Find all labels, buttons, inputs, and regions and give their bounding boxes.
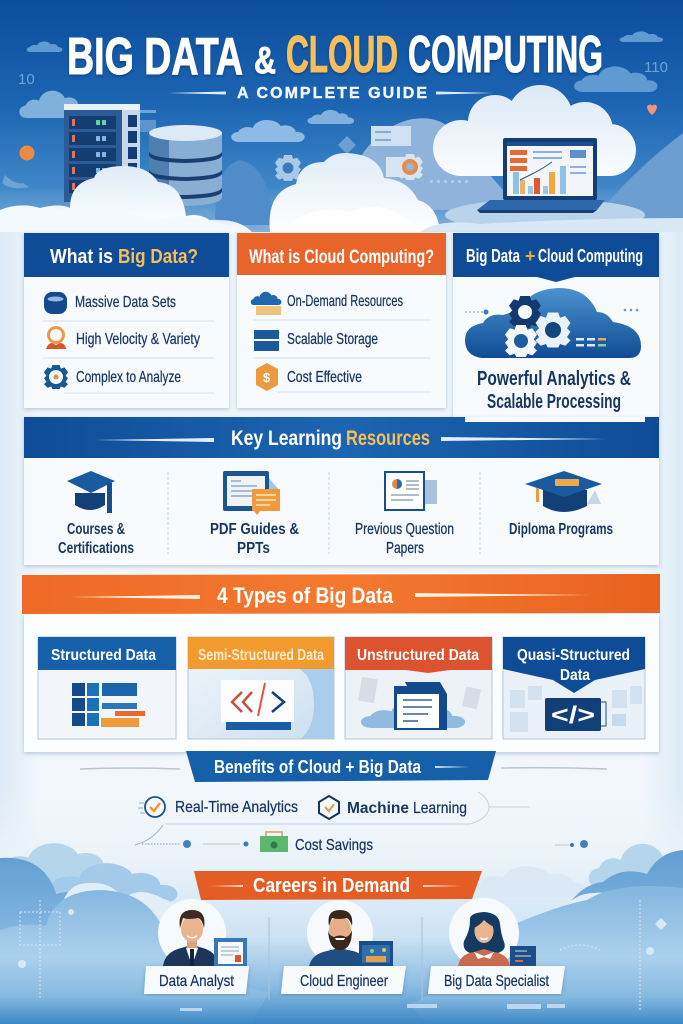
caption: powerful analytics (477, 368, 631, 413)
role label: cloud engineer: Cloud Engineer (300, 973, 389, 990)
header band: key learning resources (24, 417, 659, 458)
item: scalable storage: Scalable Storage (287, 331, 378, 348)
subtitle: A COMPLETE GUIDE (237, 85, 427, 102)
item: massive data sets: Massive Data Sets (75, 294, 176, 311)
title: quasi-structured data: Quasi-Structured (517, 647, 630, 664)
item: diploma programs: Diploma Programs (509, 521, 613, 538)
benefits list (135, 792, 588, 854)
item: courses and certifications: Certifications (58, 540, 134, 557)
icon: code sheet (221, 680, 294, 730)
role label: data analyst: Data Analyst (159, 973, 234, 990)
header: what is big data (24, 233, 229, 277)
item: courses and certifications (58, 521, 134, 557)
foreground white clouds (0, 153, 440, 232)
benefit: machine learning: Machine (347, 800, 409, 817)
item: courses and certifications: Courses & (67, 521, 125, 538)
illustration: cloud and gears (465, 288, 641, 358)
card: structured data: Structured Data (51, 647, 156, 664)
panel: what is big data (24, 233, 229, 408)
item: complex to analyze: Complex to Analyze (76, 369, 181, 386)
item: pdf guides and ppts (210, 521, 299, 557)
banner: benefits of cloud + big data: Benefits of Cloud + Big Data (214, 757, 422, 777)
item: pdf guides and ppts: PDF Guides & (210, 521, 299, 538)
footer background with clouds (0, 790, 683, 1024)
item: previous question papers: Previous Question (355, 521, 454, 538)
item: high velocity and variety: High Velocity & Variety (76, 331, 200, 348)
benefit: real-time analytics: Real-Time Analytics (175, 799, 298, 816)
icon: data table (72, 683, 145, 727)
icon: cost shield (256, 363, 278, 391)
title: quasi-structured data: Data (560, 667, 590, 684)
header band: key learning resources: Resources (346, 427, 430, 450)
benefit: cost savings: Cost Savings (295, 837, 373, 854)
caption: powerful analytics: Scalable Processing (487, 391, 621, 413)
career: cloud engineer (281, 900, 406, 994)
server rack (64, 104, 140, 202)
header: big data plus cloud (453, 233, 659, 282)
icon: code window: </> (551, 702, 595, 729)
small background clouds (19, 31, 683, 230)
header band: 4 types of big data (22, 574, 660, 614)
title: quasi-structured data (517, 647, 630, 684)
panel: 4 types of big data (22, 574, 660, 752)
caption: powerful analytics: Powerful Analytics & (477, 368, 631, 390)
header: what is cloud computing: What is Cloud Computing? (249, 247, 434, 268)
icon: gear (44, 365, 68, 389)
avatar: cloud engineer (307, 900, 393, 966)
icon: velocity (46, 328, 66, 349)
item: cost effective: Cost Effective (287, 369, 362, 386)
career: big data specialist (428, 898, 565, 994)
benefit: machine learning (319, 796, 467, 819)
benefit: cost savings (260, 832, 373, 854)
item: previous question papers (355, 521, 454, 557)
big cloud behind laptop (433, 85, 636, 176)
icon: question paper (385, 472, 437, 510)
icon: code window (545, 698, 606, 731)
role label: big data specialist: Big Data Specialist (444, 973, 549, 990)
banner: careers in demand: Careers in Demand (253, 875, 410, 897)
hero illustration: 110 (644, 59, 668, 76)
hero illustration (0, 0, 683, 232)
card: quasi-structured data (503, 637, 645, 739)
panel: what is cloud computing (237, 233, 446, 408)
benefit: real-time analytics (138, 797, 298, 817)
panel: key learning resources (24, 417, 659, 565)
banner: benefits of cloud + big data (80, 751, 607, 782)
icon: database (44, 292, 67, 314)
item: on-demand resources: On-Demand Resources (287, 293, 403, 310)
title: BIG DATA (67, 28, 243, 86)
title: CLOUD (286, 26, 398, 84)
card: unstructured data (345, 637, 492, 739)
header: what is big data: Big Data? (118, 246, 198, 268)
card: structured data (38, 637, 176, 739)
gear and widgets (275, 155, 301, 181)
header: what is big data: What is (50, 246, 113, 268)
title (67, 26, 603, 86)
icon: diploma cap (525, 471, 602, 512)
benefit: machine learning: Learning (413, 800, 467, 817)
avatar: data analyst (158, 899, 247, 967)
icon: documents (358, 677, 481, 730)
subtitle (168, 85, 494, 102)
binary digits and small marks: 10 (18, 71, 35, 88)
card: unstructured data: Unstructured Data (357, 647, 479, 664)
career: data analyst (144, 899, 249, 994)
icon: cloud resources (251, 292, 281, 315)
laptop with charts (445, 138, 645, 231)
icon: pdf guide (223, 471, 280, 515)
title: & (254, 40, 276, 82)
database cylinder (149, 125, 222, 206)
card: semi-structured data: Semi-Structured Data (198, 647, 324, 664)
item: previous question papers: Papers (386, 540, 424, 557)
icon: graduation cap (67, 471, 115, 513)
header band: 4 types of big data: 4 Types of Big Data (217, 583, 394, 608)
header: big data plus cloud: + (525, 246, 536, 266)
panel: big data plus cloud computing (453, 233, 659, 417)
icon: cost shield: $ (263, 370, 271, 385)
avatar: big data specialist (449, 898, 536, 968)
header: big data plus cloud: Big Data (466, 246, 521, 266)
icon: storage (254, 330, 279, 351)
card: semi-structured data (188, 637, 334, 739)
item: pdf guides and ppts: PPTs (237, 540, 270, 557)
header band: key learning resources: Key Learning (231, 427, 342, 450)
header: what is cloud computing (237, 233, 446, 275)
banner: careers in demand (194, 871, 482, 900)
